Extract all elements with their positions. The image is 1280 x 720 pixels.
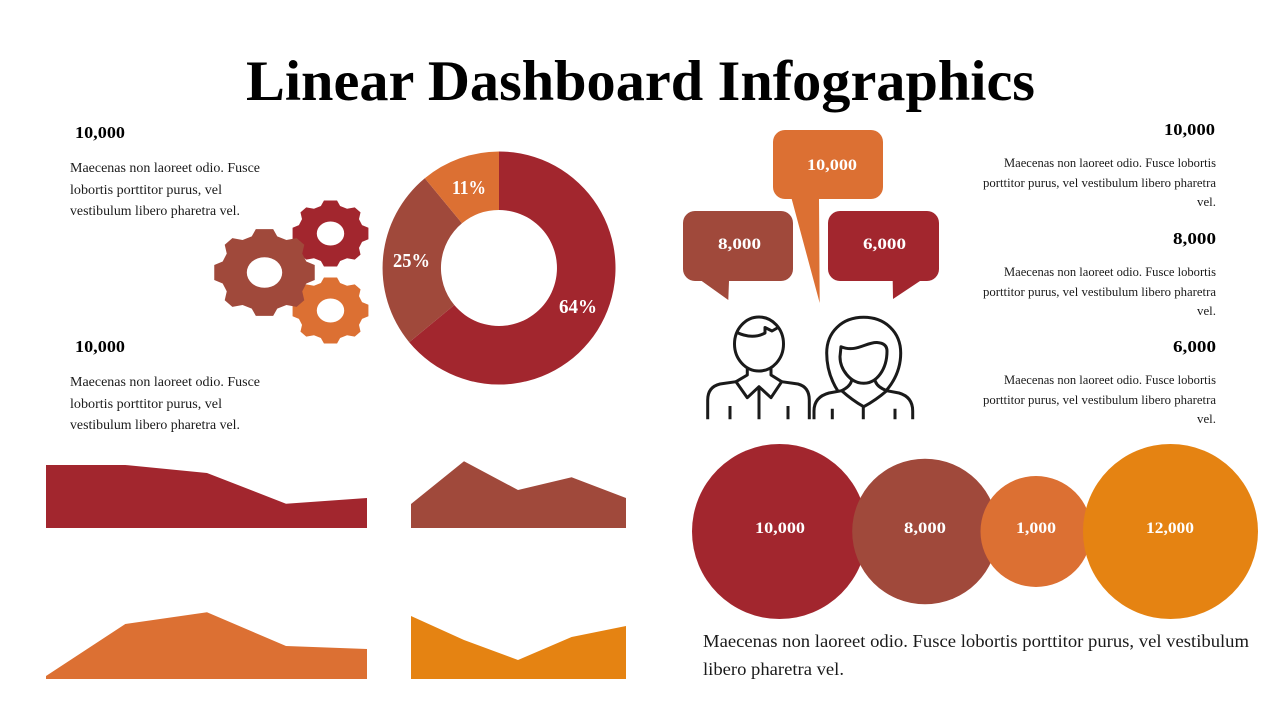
bubble: 6,000: 6,000 (863, 236, 906, 253)
text block: right 10,000 (983, 120, 1216, 209)
speech bubbles (683, 130, 939, 303)
circle: 12,000: 12,000 (1146, 520, 1194, 537)
body: right 10,000 paragraph: Maecenas non laoreet odio. Fusce lobortis (1004, 156, 1216, 170)
body: left top paragraph (70, 161, 260, 219)
body: left bottom paragraph: vestibulum libero pharetra vel. (70, 418, 240, 433)
bubble: 10,000: 10,000 (807, 157, 857, 174)
bubble chart (692, 444, 1258, 619)
label: 64%: 64% (559, 296, 597, 318)
bubble: 8,000 (683, 211, 793, 300)
icon: gears (214, 201, 368, 343)
text block: right 6,000 (983, 337, 1216, 426)
text block: left bottom (70, 337, 260, 433)
text block: right 8,000 (983, 229, 1216, 318)
icon: people (708, 317, 913, 419)
slice: 11% (425, 152, 499, 223)
body: left top paragraph: vestibulum libero pharetra vel. (70, 204, 240, 219)
heading: left top value: 10,000 (75, 123, 125, 142)
icon: woman (814, 317, 913, 419)
circle: 12,000 (1083, 444, 1258, 619)
circle: 1,000 (980, 476, 1092, 587)
body: left top paragraph: lobortis porttitor purus, vel (70, 183, 222, 198)
slice: 25% (383, 178, 462, 342)
heading: left bottom value: 10,000 (75, 337, 125, 356)
body: left bottom paragraph: Maecenas non laoreet odio. Fusce (70, 375, 260, 390)
icon: brown gear (214, 229, 315, 316)
body: right 8,000 paragraph: Maecenas non laoreet odio. Fusce lobortis (1004, 265, 1216, 279)
heading: right 6,000: 6,000 (1173, 337, 1216, 356)
icon: man (708, 317, 809, 419)
body: right 10,000 paragraph: porttitor purus, vel vestibulum libero pharetra (983, 176, 1216, 190)
text block: bottom paragraph (703, 631, 1249, 679)
donut chart (383, 152, 616, 385)
icon: red gear (293, 201, 368, 266)
circle: 8,000: 8,000 (904, 520, 946, 537)
body: right 10,000 paragraph (983, 156, 1216, 209)
body: right 6,000 paragraph: porttitor purus, vel vestibulum libero pharetra (983, 393, 1216, 407)
body: right 8,000 paragraph: porttitor purus, vel vestibulum libero pharetra (983, 285, 1216, 299)
body: right 6,000 paragraph (983, 373, 1216, 426)
circle: 8,000 (852, 459, 998, 604)
label: 25%: 25% (393, 250, 430, 272)
body: right 6,000 paragraph: Maecenas non laoreet odio. Fusce lobortis (1004, 373, 1216, 387)
circle: 10,000 (692, 444, 867, 619)
bubble: 10,000 (773, 130, 883, 303)
circle: 10,000: 10,000 (755, 520, 805, 537)
body: left bottom paragraph (70, 375, 260, 433)
bubble: 6,000 (828, 211, 939, 299)
body: right 8,000 paragraph: vel. (1197, 304, 1216, 318)
icon: orange gear (293, 278, 368, 343)
body: left bottom paragraph: lobortis porttitor purus, vel (70, 397, 222, 412)
area chart: amber (411, 616, 626, 679)
body: right 8,000 paragraph (983, 265, 1216, 318)
title: Linear Dashboard Infographics (246, 50, 1035, 113)
heading: right 8,000: 8,000 (1173, 229, 1216, 248)
circle: 1,000: 1,000 (1016, 520, 1056, 537)
text block: bottom paragraph: Maecenas non laoreet odio. Fusce lobortis porttitor purus, vel vestibulum (703, 631, 1249, 651)
area chart: brown (411, 461, 626, 528)
slice: 64% (409, 152, 616, 385)
label: 11%: 11% (452, 177, 486, 199)
area chart: red (46, 465, 367, 528)
body: right 10,000 paragraph: vel. (1197, 195, 1216, 209)
body: right 6,000 paragraph: vel. (1197, 412, 1216, 426)
area chart: orange (46, 612, 367, 679)
text block: left top (70, 123, 260, 219)
bubble: 8,000: 8,000 (718, 236, 761, 253)
text block: bottom paragraph: libero pharetra vel. (703, 659, 844, 679)
heading: right 10,000: 10,000 (1164, 120, 1215, 139)
body: left top paragraph: Maecenas non laoreet odio. Fusce (70, 161, 260, 176)
